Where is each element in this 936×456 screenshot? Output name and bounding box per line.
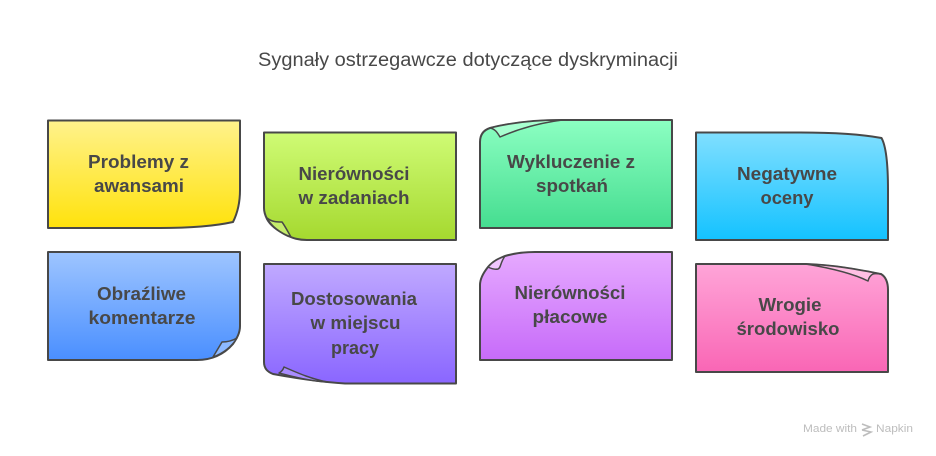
icon: napkin logo [862, 424, 871, 436]
panel: dostosowania w miejscu pracy: pracy [331, 338, 379, 358]
panel: nierówności w zadaniach: w zadaniach [297, 188, 410, 208]
panel: nierówności w zadaniach [264, 132, 456, 240]
panel: wykluczenie ze spotkań: spotkań [536, 176, 608, 196]
panel: dostosowania w miejscu pracy: Dostosowania [291, 289, 418, 309]
panel: negatywne oceny [696, 132, 888, 240]
panel: nierówności płacowe [480, 252, 672, 360]
panel: negatywne oceny: oceny [760, 188, 814, 208]
panel: wrogie środowisko [696, 264, 888, 372]
panel: obraźliwe komentarze [48, 252, 240, 360]
title: Sygnały ostrzegawcze dotyczące dyskryminacji [258, 50, 678, 71]
panel: problemy z awansami [48, 120, 240, 228]
panel: dostosowania w miejscu pracy [264, 264, 456, 384]
panel: problemy z awansami: Problemy z [88, 152, 189, 172]
panel: nierówności w zadaniach: Nierówności [298, 164, 410, 184]
panel: wrogie środowisko: Wrogie [758, 295, 822, 315]
panel: wykluczenie ze spotkań [480, 120, 672, 228]
panel: wykluczenie ze spotkań: Wykluczenie z [507, 152, 635, 172]
panel: nierówności płacowe: Nierówności [514, 283, 626, 303]
watermark: made with napkin: Made with [803, 423, 857, 435]
watermark: made with napkin [803, 423, 913, 436]
watermark: made with napkin: Napkin [876, 423, 913, 435]
panel: negatywne oceny: Negatywne [737, 164, 837, 184]
panel: wrogie środowisko: środowisko [736, 319, 840, 339]
panel: obraźliwe komentarze: Obraźliwe [97, 284, 186, 304]
panel: dostosowania w miejscu pracy: w miejscu [309, 313, 400, 333]
panel: obraźliwe komentarze: komentarze [88, 308, 196, 328]
panel: nierówności płacowe: płacowe [532, 307, 608, 327]
panel: problemy z awansami: awansami [94, 176, 184, 196]
